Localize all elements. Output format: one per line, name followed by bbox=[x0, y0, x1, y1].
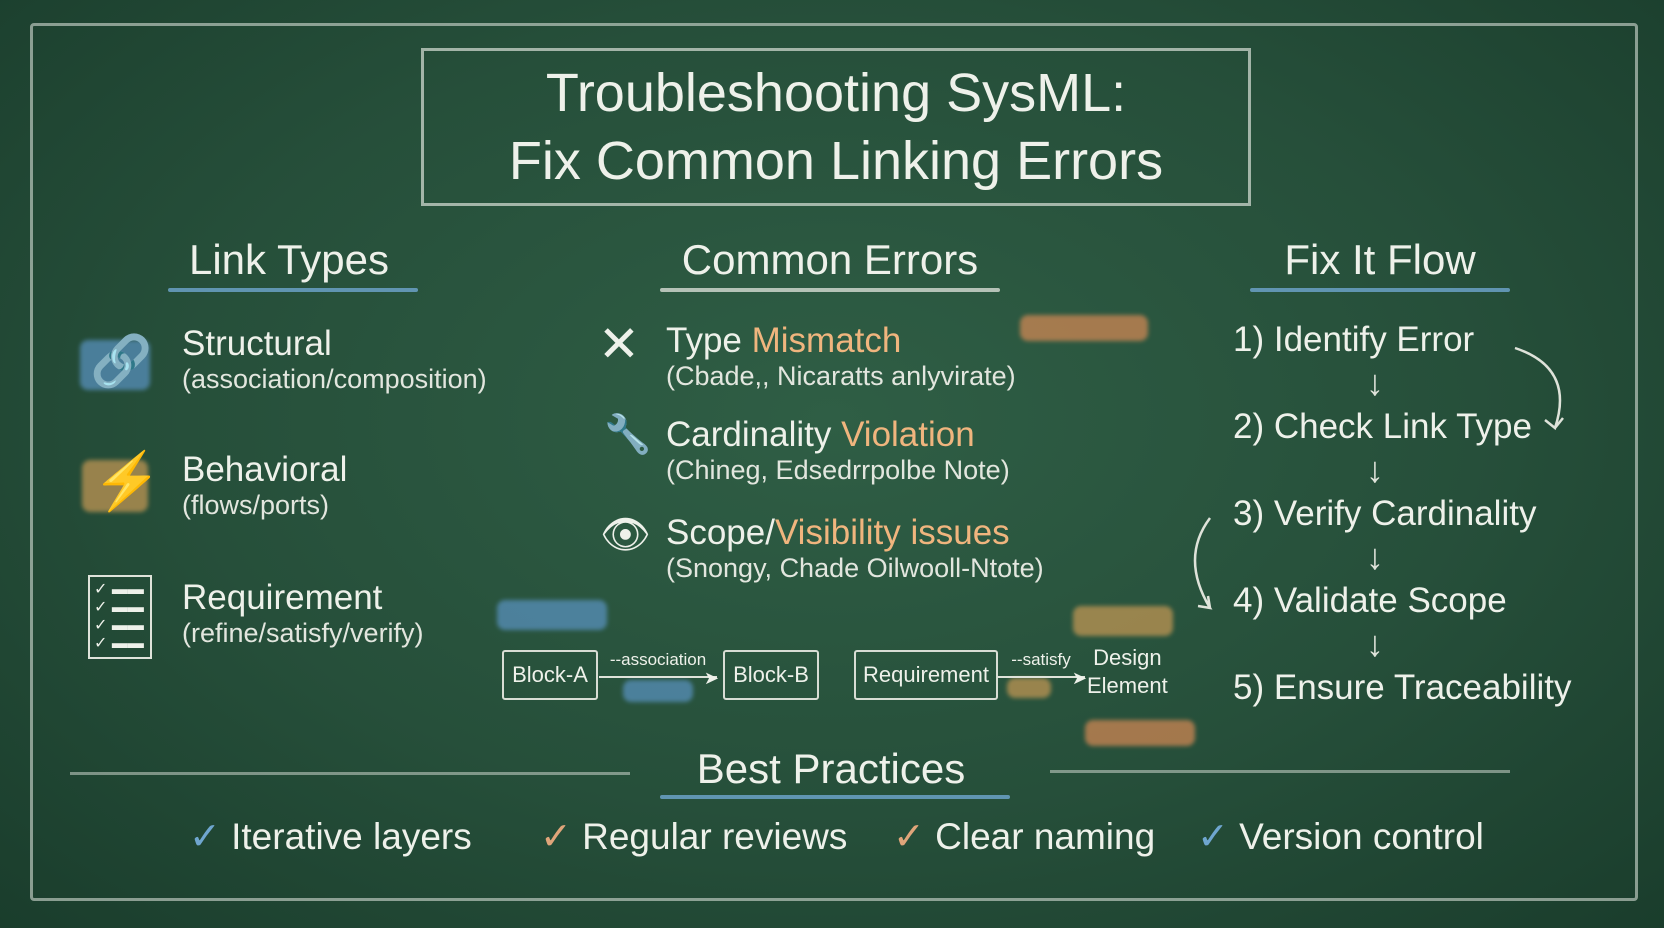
item: cardinality: (Chineg, Edsedrrpolbe Note) bbox=[666, 455, 1010, 485]
item: behavioral bbox=[182, 450, 347, 520]
item: type mismatch: Type Mismatch bbox=[666, 321, 901, 360]
box: block-b: Block-B bbox=[733, 662, 809, 687]
heading: link types: Link Types bbox=[189, 236, 389, 283]
arrow: association: ➤ bbox=[704, 668, 719, 688]
curved arrows bbox=[1194, 346, 1564, 610]
icon: lightning: ⚡ bbox=[92, 449, 162, 512]
panel: fix it flow: ↓ bbox=[1366, 536, 1384, 577]
arrow: satisfy: ➤ bbox=[1072, 668, 1087, 688]
item: behavioral: Behavioral bbox=[182, 450, 347, 489]
title bbox=[421, 48, 1251, 206]
step 1: 1) Identify Error bbox=[1233, 320, 1474, 359]
icon: chain link: 🔗 bbox=[90, 333, 152, 389]
item: scope: (Snongy, Chade Oilwooll-Ntote) bbox=[666, 553, 1044, 583]
item: structural: Structural bbox=[182, 324, 332, 363]
step 2: 2) Check Link Type bbox=[1233, 407, 1532, 446]
step 5: 5) Ensure Traceability bbox=[1233, 668, 1571, 707]
icon: checklist bbox=[88, 575, 152, 659]
item: requirement: (refine/satisfy/verify) bbox=[182, 618, 424, 648]
label: design element bbox=[1087, 645, 1168, 698]
icon: checklist: ✓ ▬▬ bbox=[94, 617, 144, 634]
item: requirement: Requirement bbox=[182, 578, 382, 617]
item: structural: (association/composition) bbox=[182, 364, 487, 394]
heading: best practices: Best Practices bbox=[697, 745, 965, 792]
icon: checklist: ✓ ▬▬ bbox=[94, 581, 144, 598]
box: requirement bbox=[854, 650, 998, 700]
box: block-a: Block-A bbox=[512, 662, 588, 687]
item: scope: Scope/Visibility issues bbox=[666, 513, 1010, 552]
arrow: satisfy: --satisfy bbox=[1011, 650, 1071, 669]
box: block-a bbox=[502, 650, 598, 700]
arrow: association: --association bbox=[610, 650, 706, 669]
item: requirement bbox=[182, 578, 424, 648]
panel: common errors bbox=[598, 312, 1151, 583]
panel: link types bbox=[77, 324, 487, 659]
item: type mismatch bbox=[666, 321, 1016, 391]
item: version control: ✓ Version control bbox=[1197, 816, 1484, 858]
item: regular reviews: ✓ Regular reviews bbox=[540, 816, 847, 858]
arrow down: ↓ bbox=[1366, 362, 1384, 403]
icon: x mark: ✕ bbox=[598, 316, 640, 372]
diagram: link examples bbox=[494, 597, 1198, 749]
heading: fix it flow: Fix It Flow bbox=[1284, 236, 1476, 283]
heading: common errors: Common Errors bbox=[682, 236, 978, 283]
title: Troubleshooting SysML: bbox=[546, 63, 1126, 123]
box: block-b bbox=[723, 650, 819, 700]
item: iterative layers: ✓ Iterative layers bbox=[189, 816, 472, 858]
icon: checklist: ✓ ▬▬ bbox=[94, 635, 144, 652]
item: clear naming: ✓ Clear naming bbox=[893, 816, 1155, 858]
step 3: 3) Verify Cardinality bbox=[1233, 494, 1536, 533]
icon: wrench: 🔧 bbox=[604, 414, 651, 456]
icon: checklist: ✓ ▬▬ bbox=[94, 599, 144, 616]
icon: eye: 👁 bbox=[600, 513, 651, 557]
panel: fix it flow: ↓ bbox=[1366, 449, 1384, 490]
panel: fix it flow: ↓ bbox=[1366, 623, 1384, 664]
item: scope bbox=[666, 513, 1044, 583]
box: requirement: Requirement bbox=[863, 662, 989, 687]
item: structural bbox=[182, 324, 487, 394]
item: cardinality bbox=[666, 415, 1010, 485]
label: design element: Design bbox=[1093, 645, 1162, 670]
item: type mismatch: (Cbade,, Nicaratts anlyvirate) bbox=[666, 361, 1016, 391]
step 4: 4) Validate Scope bbox=[1233, 581, 1507, 620]
arrow: association bbox=[599, 650, 719, 688]
panel: fix it flow bbox=[1194, 320, 1572, 707]
title: Fix Common Linking Errors bbox=[509, 131, 1163, 191]
item: cardinality: Cardinality Violation bbox=[666, 415, 975, 454]
item: behavioral: (flows/ports) bbox=[182, 490, 329, 520]
best practices list bbox=[189, 816, 1484, 858]
label: design element: Element bbox=[1087, 673, 1168, 698]
arrow: satisfy bbox=[998, 650, 1087, 688]
